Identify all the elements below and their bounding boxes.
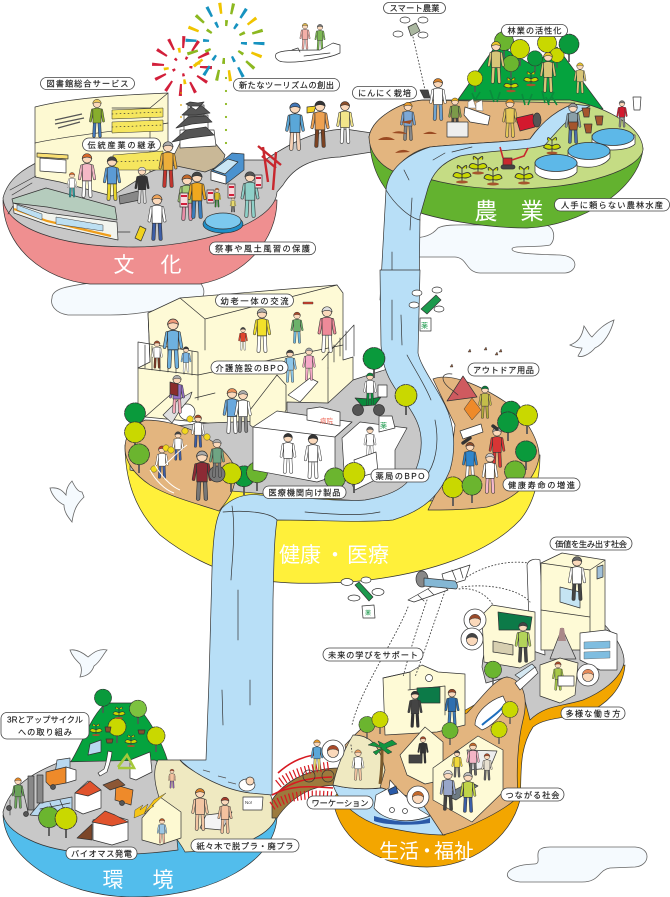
label: intergenerational: 幼老一体の交流 [220,296,288,306]
island base: pink [3,200,277,284]
hospital [253,407,352,482]
label: outdoor goods: アウトドア用品 [473,366,534,375]
shinkansen [475,667,538,730]
trees by pharmacy [325,463,365,497]
label: smart agriculture [384,2,446,14]
panel: life and welfare island [303,553,625,867]
title: environment: 環 [102,869,124,892]
bird: left middle [50,481,84,522]
care facility building [138,285,354,440]
title: culture: 文 [114,254,134,277]
label: paper and wood: 紙々木で脱プラ・廃プラ [196,841,294,851]
child in solar house [134,793,166,842]
train [8,176,130,240]
palm tree and beach worker [353,740,397,784]
label: paper and wood [191,839,299,852]
robots and potted plants [566,97,641,142]
windmill and recycling symbol [98,751,134,776]
title: health and medical: ・ [324,544,346,567]
ground: grey [3,760,178,854]
label: medical products [263,486,346,498]
title: life and welfare [379,840,474,863]
camp: tent and camper [443,347,502,420]
satellite [408,565,470,602]
label: medical products: 医療機関向け製品 [268,488,340,498]
ground: light green [369,100,643,189]
label: unmanned farming: 人手に頼らない農林水産 [561,200,663,210]
ground and road [3,129,372,247]
island base: green [370,145,643,228]
beach scene on environment island [169,769,263,832]
title: culture [114,254,182,277]
bus [211,153,244,184]
ground: tan field [369,100,575,172]
forest hill [457,44,603,109]
island base: sea [3,815,277,897]
workspace with laptop user [515,658,599,703]
label: care BPO: 介護施設のBPO [216,363,284,373]
ground: sand [155,760,277,852]
label: festivals [210,242,316,255]
wheelchair and carers [163,375,250,432]
label: connected society: つながる社会 [506,790,560,800]
label: future learning: 未来の学びをサポート [328,650,418,660]
drone with medicine [409,287,444,331]
label: workation: ワーケーション [312,799,368,808]
ground: tan playground [125,420,236,511]
title: health and medical [279,544,389,567]
title: agriculture: 業 [520,198,544,224]
bridge [272,753,340,818]
sea [333,785,445,835]
exercising seniors [460,424,504,492]
label: unmanned farming [554,198,670,211]
island base: yellow [125,445,540,583]
title: environment: 境 [152,869,174,892]
label: diverse work [561,707,625,720]
label: 3R and upcycling [1,712,89,739]
panel: health and medical island [125,270,540,795]
title: agriculture: 農 [474,198,498,224]
label: smart agriculture: スマート農業 [390,3,440,13]
medicine drone lower: 薬 [365,609,371,617]
people on balcony [152,302,335,371]
island base: orange [333,665,625,867]
label: future learning [323,648,423,661]
pharmacy: 薬 [380,421,387,430]
playground trees [125,403,267,495]
forest workers [489,42,585,92]
fish ponds [535,128,635,180]
east bank trees [443,401,537,506]
river and lower waterfall [180,270,454,795]
label: connected society [501,788,564,801]
title: life and welfare: 生活 [379,840,419,863]
label: pharmacy BPO [371,469,429,482]
bed and patients [284,348,318,402]
label: library: 図書館総合サービス [46,78,128,88]
label: outdoor goods [468,363,539,376]
label: pharmacy BPO: 薬局のBPO [376,471,424,481]
panel: agriculture island [369,17,643,300]
label: forestry [502,24,568,36]
label: value creating society: 価値を生み出す社会 [555,539,627,549]
forest trees [467,32,579,92]
cyclist on bridge [303,740,344,782]
ferry boat [374,780,430,825]
airplane with travellers [275,23,340,62]
label: tourism [234,78,340,91]
solar panels [30,740,101,817]
title: environment [102,869,174,892]
crops and leeks [472,90,557,105]
label: forestry: 林業の活性化 [508,26,562,36]
label: biomass [66,847,137,860]
ground: tan [345,677,525,835]
pharmacy [342,416,407,490]
title: health and medical: 健康 [279,544,321,567]
cheering children and elders [150,415,225,499]
cloud: right bottom [507,847,647,882]
trees on tan ground [359,661,518,745]
label: value creating society [550,537,632,550]
library building [35,93,168,196]
delivery motorbike [352,348,417,416]
label: tourism: 新たなツーリズムの創出 [239,80,334,90]
label: festivals: 祭事や風土風習の保護 [215,244,310,254]
label: workation [307,796,373,809]
people: townspeople [68,142,258,241]
forklift and worker [6,775,43,816]
cloud: right top [397,225,575,273]
ground: grey [482,615,624,720]
label: 3R and upcycling: 3Rとアップサイクル [7,716,83,724]
school [383,665,465,735]
remote workspace house [400,727,443,784]
label: diverse work: 多様な働き方 [566,708,620,718]
castle [170,102,225,172]
label: garlic: にんにく栽培 [358,88,411,98]
title: life and welfare: 福祉 [434,840,474,863]
label: library [40,78,134,90]
label: garlic [352,86,416,99]
title: life and welfare: ・ [417,841,437,863]
label: traditional industry [82,138,160,151]
trees on hill [90,689,165,752]
forest hill [70,703,168,763]
beach scene on environment island: No! [245,800,252,805]
festival pool and lanterns [180,175,262,233]
houses [75,752,181,845]
title: culture: 化 [160,254,182,277]
meeting house [433,736,503,822]
label: healthy life: 健康寿命の増進 [508,480,575,490]
crab robot [500,147,528,169]
farmers [378,98,541,153]
bird: left lower [70,650,107,677]
drone with medicine: 薬 [421,321,428,330]
tourists on road [287,101,352,149]
river and upper waterfall [380,104,590,300]
panel: environment island [3,689,277,897]
classroom with teacher [461,605,535,668]
panel: culture island [3,8,372,284]
label: biomass: バイオマス発電 [71,850,132,858]
ground: tan east bank [428,377,539,510]
trucks [46,767,133,806]
fireworks [158,8,259,146]
bird: right [570,320,614,357]
torii gate [258,146,281,190]
title: agriculture [474,198,544,224]
label: 3R and upcycling: への取り組み [18,727,72,737]
satellite signal lines [351,562,530,752]
title: health and medical: 医療 [347,544,389,567]
ground: grey [130,365,440,502]
drone and laptop farmer [393,17,445,119]
tall office and tower [527,553,617,670]
cloud: left top [52,279,204,315]
label: intergenerational [216,294,294,307]
label: healthy life [503,478,580,491]
label: traditional industry: 伝統産業の継承 [88,140,156,150]
hospital: 病院 [320,416,334,425]
lower trees [39,807,77,838]
label: care BPO [211,361,288,374]
seedlings on light green field [453,138,560,186]
medicine drone lower [341,577,384,618]
sand at palm beach [333,735,385,789]
